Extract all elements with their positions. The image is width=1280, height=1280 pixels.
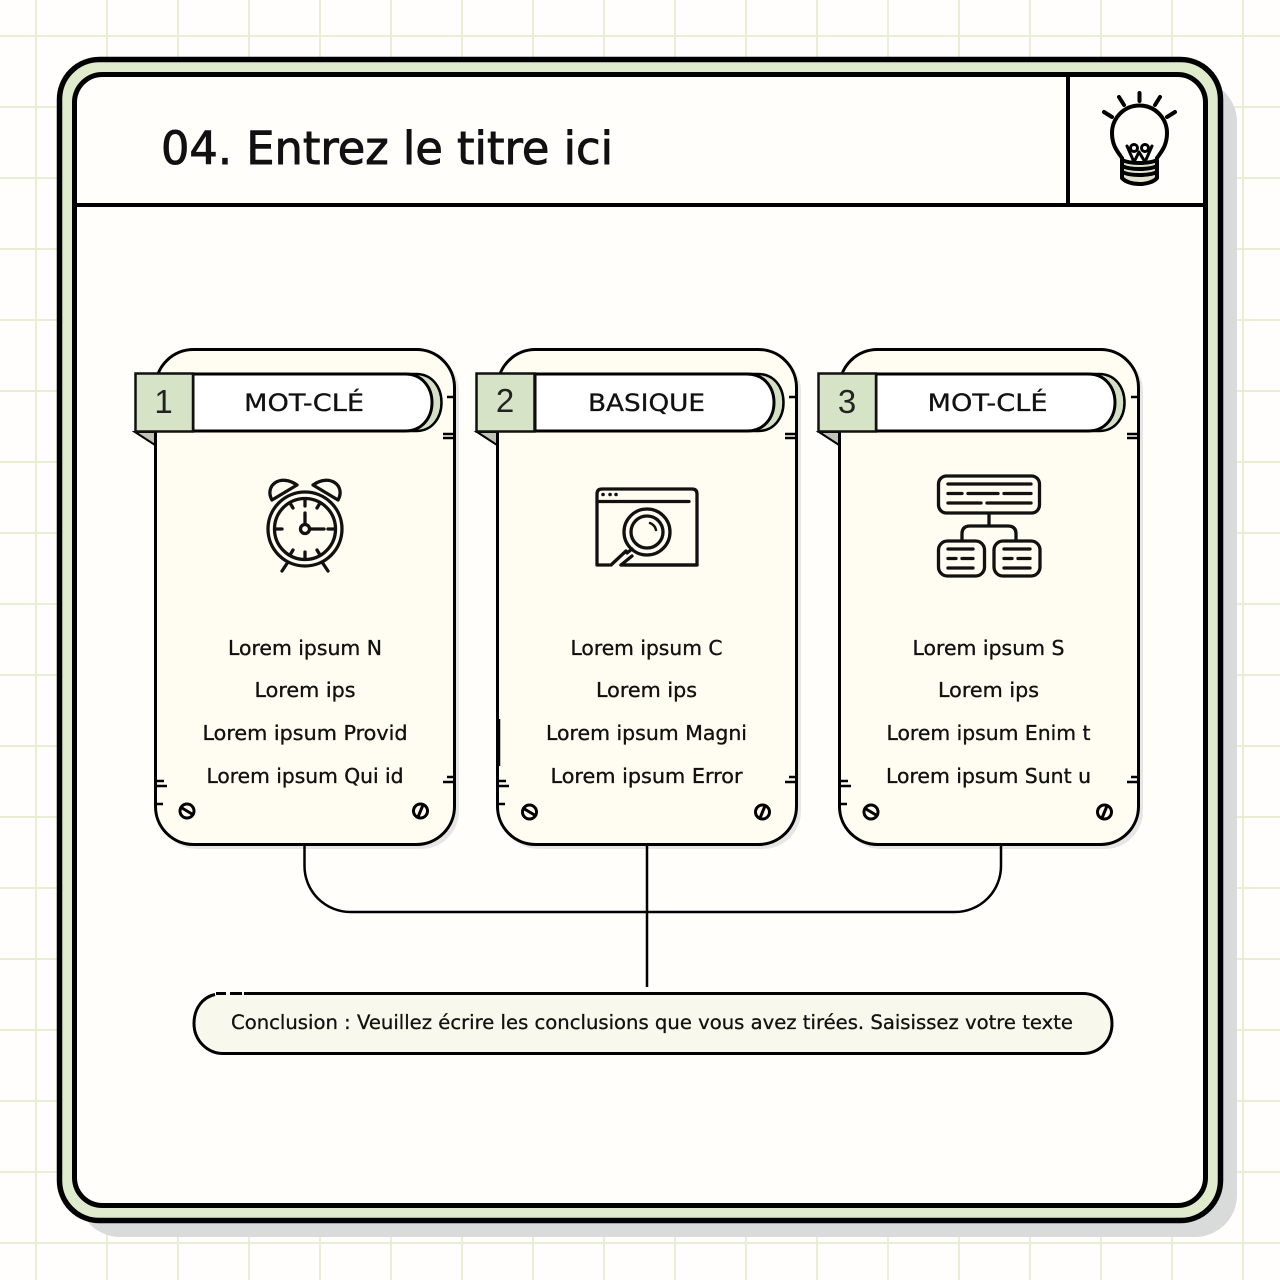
panel: card 3 xyxy=(818,350,1143,849)
card text: Lorem ipsum Error xyxy=(550,764,743,788)
callout: conclusion xyxy=(193,993,1113,1054)
keyword tab: 2 xyxy=(496,382,514,419)
screws xyxy=(180,804,428,818)
card text: Lorem ips xyxy=(254,678,356,702)
card text: Lorem ipsum Provid xyxy=(202,721,408,745)
card text: Lorem ips xyxy=(938,678,1039,702)
card text xyxy=(886,636,1091,788)
screws xyxy=(522,805,770,819)
icon: browser with magnifier xyxy=(597,489,697,565)
card text xyxy=(546,636,747,788)
icon: hierarchy diagram xyxy=(938,476,1040,576)
card text: Lorem ipsum Magni xyxy=(546,721,747,745)
card text: Lorem ipsum N xyxy=(228,636,382,660)
callout: conclusion: Conclusion : Veuillez écrire les conclusions que vous avez tirées. Saisissez votre texte xyxy=(231,1011,1073,1034)
keyword tab: 1 xyxy=(154,383,173,420)
card text: Lorem ipsum C xyxy=(570,636,722,660)
keyword tab: MOT-CLÉ xyxy=(928,388,1048,417)
card text xyxy=(202,636,408,788)
keyword tab xyxy=(818,374,1124,445)
keyword tab: BASIQUE xyxy=(588,389,705,417)
connector lines xyxy=(304,845,1001,987)
panel: card 2 xyxy=(476,350,801,849)
icon: alarm clock xyxy=(268,480,342,571)
screws xyxy=(864,805,1112,819)
keyword tab: 3 xyxy=(838,383,856,420)
keyword tab xyxy=(476,374,784,445)
keyword tab: MOT-CLÉ xyxy=(244,388,364,417)
panel: card 1 xyxy=(135,350,459,849)
card text: Lorem ipsum S xyxy=(912,636,1064,660)
icon: light bulb xyxy=(1104,93,1175,184)
card text: Lorem ipsum Enim t xyxy=(886,721,1091,745)
card text: Lorem ipsum Sunt u xyxy=(886,764,1091,788)
card text: Lorem ipsum Qui id xyxy=(206,764,404,788)
keyword tab xyxy=(135,374,442,445)
card text: Lorem ips xyxy=(596,678,697,702)
title: 04. Entrez le titre ici xyxy=(161,122,613,175)
